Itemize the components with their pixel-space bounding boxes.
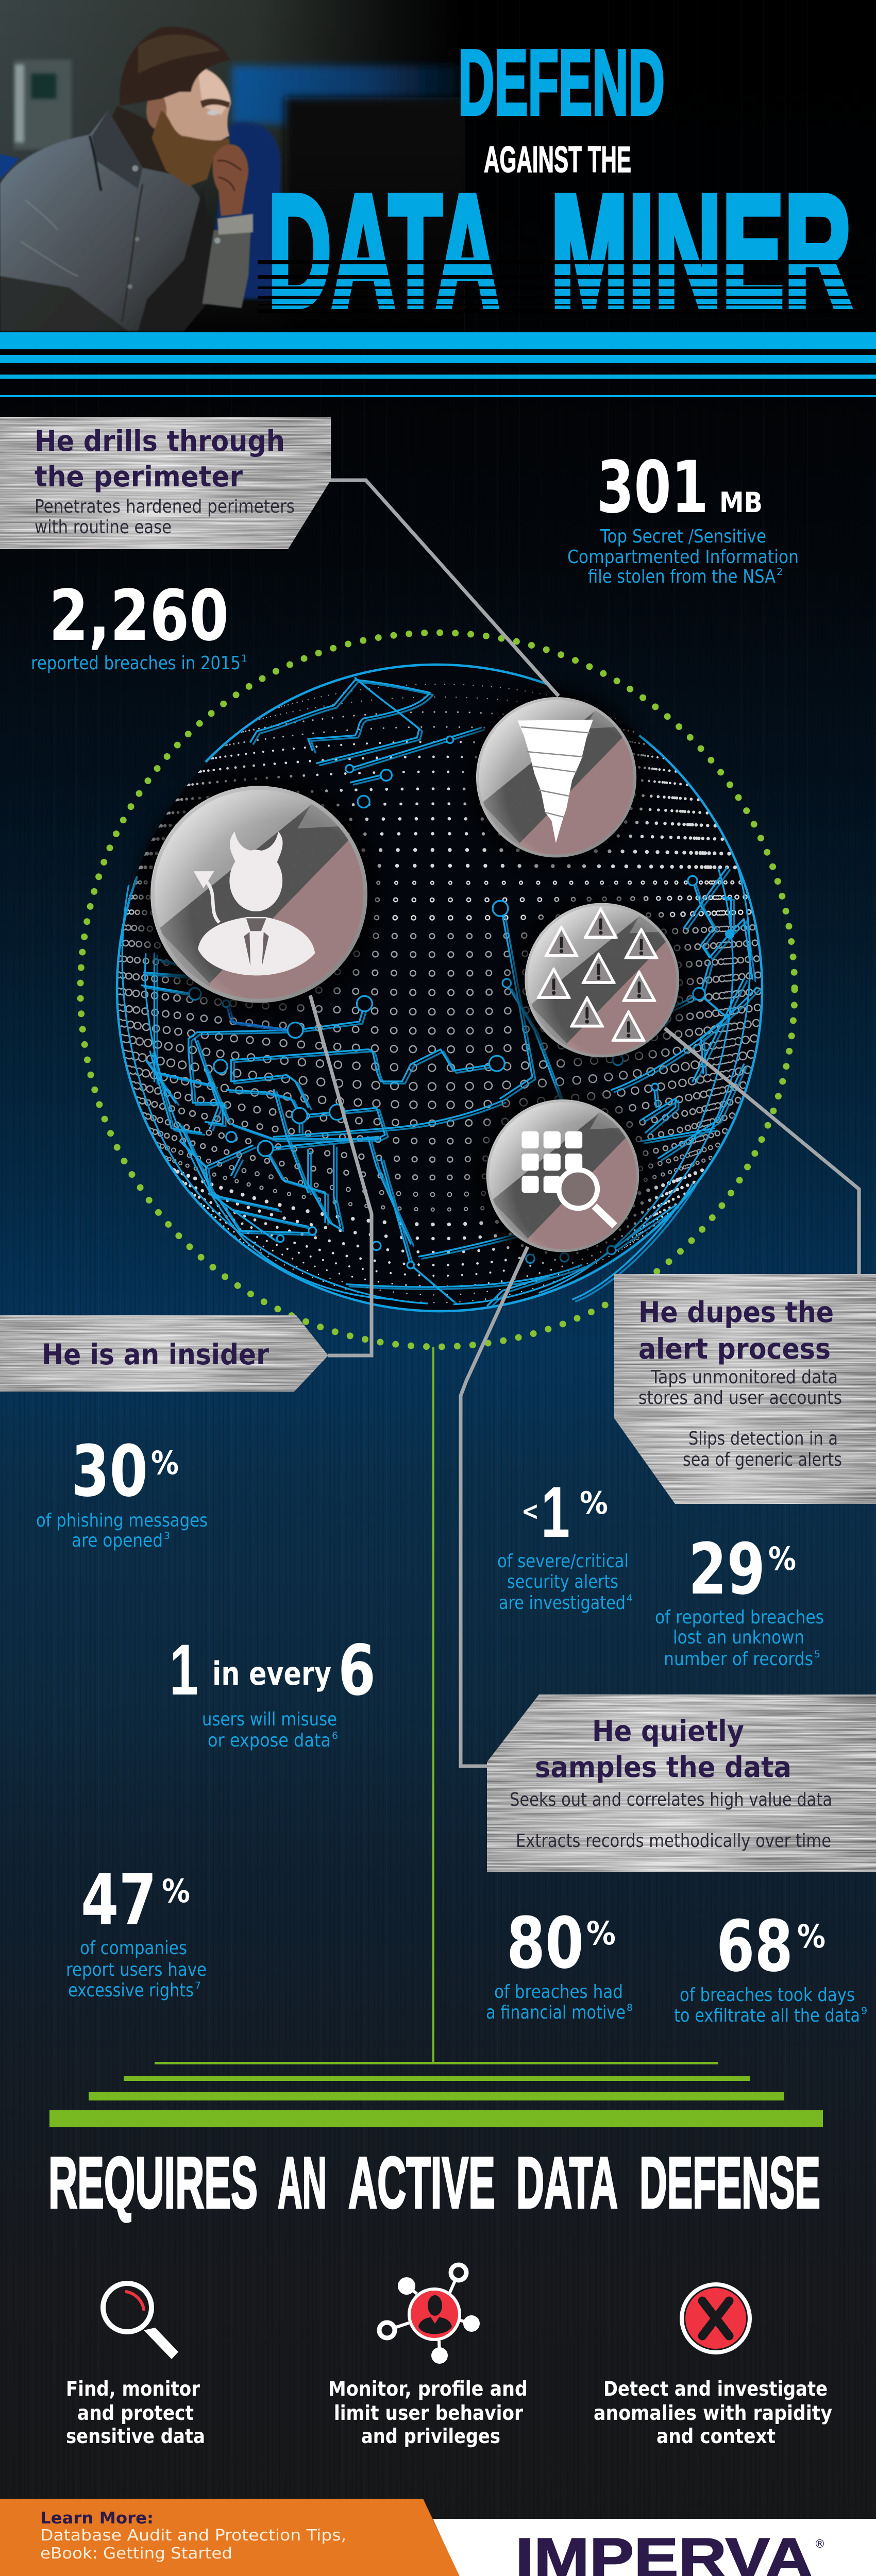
- icon: drill bit: [517, 720, 593, 843]
- header photo: man at computer: [0, 0, 465, 334]
- stat: 29%: 5: [814, 1649, 820, 1660]
- stat: 30%: of phishing messages: [36, 1510, 208, 1531]
- stat: 80%: 80: [507, 1903, 584, 1985]
- panel: he quietly samples the data: [487, 1694, 876, 1872]
- text: monitor profile limit: limit user behavior: [334, 2402, 524, 2425]
- text: find monitor protect: and protect: [77, 2402, 194, 2425]
- stat: 301 MB: Top Secret /Sensitive: [600, 526, 766, 547]
- stat: 29%: number of records: [664, 1649, 813, 1670]
- stat: less than 1%: security alerts: [507, 1571, 618, 1592]
- heading: requires an active data defense: [48, 2142, 820, 2223]
- lens: warning alerts: [514, 893, 696, 1067]
- learn more text: Database Audit and Protection Tips,: [40, 2527, 346, 2545]
- lens: drill: [466, 688, 654, 867]
- text: find monitor protect: [66, 2378, 205, 2448]
- heading: requires an active data defense: REQUIRES: [48, 2142, 258, 2223]
- stat: 29%: 29: [688, 1529, 765, 1611]
- icon: user network: [379, 2265, 480, 2364]
- description: Taps unmonitored data: [650, 1367, 838, 1388]
- heading: the perimeter: [35, 460, 243, 493]
- stat: 30%: %: [151, 1444, 179, 1482]
- stat: 1 in every 6: or expose data: [208, 1730, 331, 1751]
- stat: 1 in every 6: 6: [332, 1730, 338, 1741]
- description: with routine ease: [35, 517, 172, 538]
- heading: alert process: [638, 1332, 831, 1365]
- stat: 47%: [66, 1859, 207, 2001]
- stat: 68%: %: [797, 1918, 826, 1955]
- icon: data grid with magnifier: [521, 1131, 615, 1226]
- title: AGAINST THE: AGAINST THE: [484, 140, 631, 180]
- heading: [535, 1715, 791, 1784]
- blue header stripes: [0, 332, 876, 397]
- description: [638, 1367, 842, 1470]
- title: DATA MINER: DATA: [268, 161, 499, 340]
- circuit traces: [142, 678, 760, 1308]
- panel: he drills through the perimeter: [0, 417, 331, 549]
- description: stores and user accounts: [638, 1387, 842, 1409]
- green foundation bars: [49, 2062, 823, 2127]
- description: Penetrates hardened perimeters: [35, 496, 295, 517]
- stat: 1 in every 6: 1: [170, 1629, 198, 1710]
- stat: 2,260: [31, 575, 247, 674]
- stat: 1 in every 6: in every: [212, 1655, 331, 1692]
- stat: 29%: %: [768, 1540, 796, 1578]
- stat: 301 MB: MB: [719, 486, 763, 519]
- panel: learn more: [0, 2499, 461, 2576]
- logo band: [433, 2519, 876, 2576]
- panel: he dupes the alert process: [614, 1274, 876, 1504]
- stat: 47%: %: [162, 1872, 190, 1910]
- stat: less than 1%: 1: [541, 1471, 570, 1552]
- stat: 80%: [486, 1903, 633, 2023]
- text: find monitor protect: sensitive data: [66, 2425, 205, 2448]
- stat: 30%: 3: [164, 1530, 170, 1541]
- stat: less than 1%: %: [580, 1485, 608, 1521]
- stat: 29%: of reported breaches: [655, 1607, 824, 1628]
- learn more text: Learn More:: [40, 2509, 154, 2528]
- heading: samples the data: [535, 1751, 791, 1784]
- description: [35, 496, 295, 538]
- stat: 301 MB: 301: [597, 446, 709, 529]
- learn more text: [40, 2509, 346, 2563]
- text: monitor profile limit: Monitor, profile and: [328, 2378, 528, 2401]
- stat: 47%: 7: [195, 1980, 201, 1991]
- stat: less than 1%: <: [521, 1496, 539, 1526]
- title: DATA MINER: [258, 161, 866, 340]
- heading: [35, 425, 285, 493]
- description: sea of generic alerts: [683, 1449, 842, 1470]
- stat: 47%: of companies: [80, 1938, 187, 1959]
- stat: 2,260: 2,260: [49, 575, 229, 657]
- stat: 29%: lost an unknown: [673, 1627, 804, 1648]
- heading: requires an active data defense: AN: [278, 2142, 327, 2223]
- stat: 80%: %: [586, 1914, 616, 1952]
- text: detect investigate: Detect and investigate: [603, 2378, 828, 2401]
- globe dot grid: [116, 684, 761, 1302]
- leader lines: [310, 480, 859, 1766]
- text: monitor profile limit: [328, 2378, 528, 2448]
- heading: requires an active data defense: DATA: [516, 2142, 618, 2223]
- text: detect investigate: and context: [656, 2425, 776, 2448]
- stat: 47%: report users have: [66, 1959, 207, 1980]
- heading: He quietly: [592, 1715, 744, 1748]
- stat: 1 in every 6: 6: [338, 1630, 376, 1711]
- green stem: [432, 1347, 434, 2063]
- stat: less than 1%: are investigated: [499, 1592, 626, 1614]
- stat: 301 MB: Compartmented Information: [567, 547, 799, 568]
- heading: He is an insider: [42, 1338, 269, 1371]
- stat: 1 in every 6: users will misuse: [202, 1709, 337, 1730]
- stat: 2,260: reported breaches in 2015: [31, 653, 241, 674]
- text: detect investigate: [594, 2378, 832, 2448]
- stat: less than 1%: [497, 1471, 633, 1614]
- panel: he is an insider: [0, 1315, 328, 1392]
- stat: 80%: 8: [627, 2002, 633, 2013]
- stat: 30%: [36, 1431, 208, 1551]
- stat: 80%: of breaches had: [494, 1981, 623, 2003]
- description: Slips detection in a: [688, 1428, 838, 1449]
- lens: devil insider: [137, 773, 391, 1016]
- icon: warning triangles: [537, 908, 658, 1041]
- icon: red x: [680, 2282, 752, 2354]
- text: monitor profile limit: and privileges: [361, 2425, 500, 2448]
- globe outline and meridians: [117, 665, 762, 1311]
- stat: less than 1%: 4: [627, 1592, 633, 1604]
- heading: He dupes the: [638, 1296, 834, 1329]
- stat: 1 in every 6: [170, 1629, 376, 1751]
- title: DEFEND: DEFEND: [458, 31, 665, 134]
- stat: 30%: 30: [71, 1431, 148, 1513]
- dotted green ring: [80, 633, 795, 1347]
- stat: 301 MB: [567, 446, 799, 587]
- stat: 301 MB: 2: [777, 566, 783, 578]
- heading: requires an active data defense: ACTIVE: [348, 2142, 495, 2223]
- globe with circuits and lenses: [116, 665, 762, 1311]
- stat: 68%: 9: [861, 2005, 867, 2016]
- lens: data grid: [475, 1088, 655, 1263]
- stat: 80%: a financial motive: [486, 2002, 626, 2023]
- stat: 68%: 68: [716, 1906, 793, 1988]
- stat: 68%: [674, 1906, 867, 2026]
- stat: 47%: 47: [81, 1859, 157, 1941]
- heading: He drills through: [35, 425, 285, 457]
- icon: devil businessman: [194, 832, 315, 975]
- stat: 301 MB: file stolen from the NSA: [588, 566, 776, 587]
- stat: 2,260: 1: [241, 653, 247, 664]
- learn more text: eBook: Getting Started: [40, 2545, 232, 2563]
- text: detect investigate: anomalies with rapidity: [594, 2402, 832, 2425]
- logo: Imperva: ®: [814, 2538, 826, 2551]
- stat: 29%: [655, 1529, 824, 1670]
- heading: [638, 1296, 834, 1365]
- description: [510, 1789, 832, 1852]
- stat: less than 1%: of severe/critical: [497, 1551, 629, 1572]
- icon: magnifier: [103, 2283, 178, 2359]
- stat: 47%: excessive rights: [68, 1980, 194, 2001]
- stat: 30%: are opened: [72, 1530, 163, 1551]
- text: find monitor protect: Find, monitor: [66, 2378, 200, 2401]
